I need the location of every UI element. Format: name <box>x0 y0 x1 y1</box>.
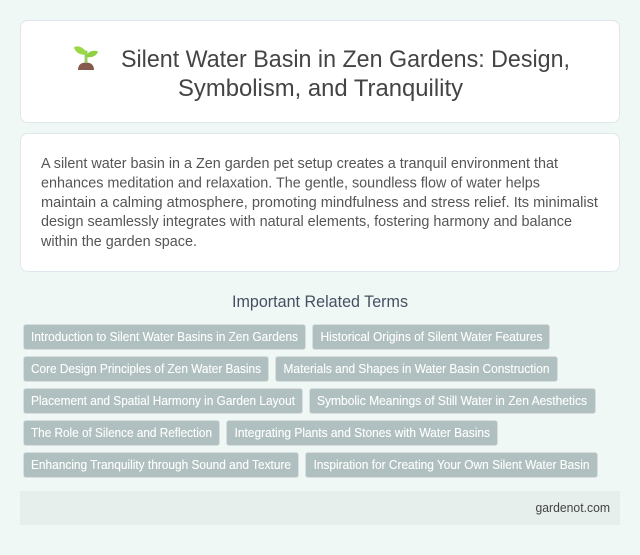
chip: The Role of Silence and Reflection <box>31 426 212 440</box>
chip <box>312 324 550 350</box>
chip <box>24 324 306 350</box>
footer: gardenot.com <box>536 501 610 515</box>
description text: within the garden space. <box>40 233 197 250</box>
chip <box>24 388 302 414</box>
header panel <box>20 20 620 122</box>
icon: seedling <box>74 46 98 70</box>
chip: Placement and Spatial Harmony in Garden Layout <box>31 394 295 408</box>
chip: Integrating Plants and Stones with Water Basins <box>234 426 490 440</box>
chip <box>310 388 596 414</box>
chip: Symbolic Meanings of Still Water in Zen Aesthetics <box>317 394 587 408</box>
heading: related terms: Important Related Terms <box>232 293 408 311</box>
chip: Historical Origins of Silent Water Features <box>320 330 542 344</box>
chip: Materials and Shapes in Water Basin Construction <box>284 362 550 376</box>
description text: enhances meditation and relaxation. The gentle, soundless flow of water helps <box>41 174 540 192</box>
title: Silent Water Basin in Zen Gardens: Design, <box>121 46 570 73</box>
chip <box>24 452 298 478</box>
chip <box>24 420 220 446</box>
description text <box>40 155 599 250</box>
title <box>121 46 570 102</box>
chip: Core Design Principles of Zen Water Basins <box>31 362 261 376</box>
chip: Inspiration for Creating Your Own Silent Water Basin <box>314 458 590 472</box>
chip: Enhancing Tranquility through Sound and Texture <box>31 458 291 472</box>
title: Symbolism, and Tranquility <box>178 75 464 102</box>
chip <box>24 356 268 382</box>
chip <box>276 356 558 382</box>
panel: description <box>20 134 620 272</box>
footer <box>20 491 620 525</box>
description text: design seamlessly integrates with natural elements, fostering harmony and balance <box>41 213 572 230</box>
chip: Introduction to Silent Water Basins in Zen Gardens <box>31 330 298 344</box>
chip <box>226 420 498 446</box>
chip <box>306 452 598 478</box>
description text: A silent water basin in a Zen garden pet setup creates a tranquil environment that <box>41 155 559 172</box>
description text: maintain a calming atmosphere, promoting mindfulness and stress relief. Its minimalist <box>41 194 599 211</box>
related term chips <box>24 324 598 478</box>
